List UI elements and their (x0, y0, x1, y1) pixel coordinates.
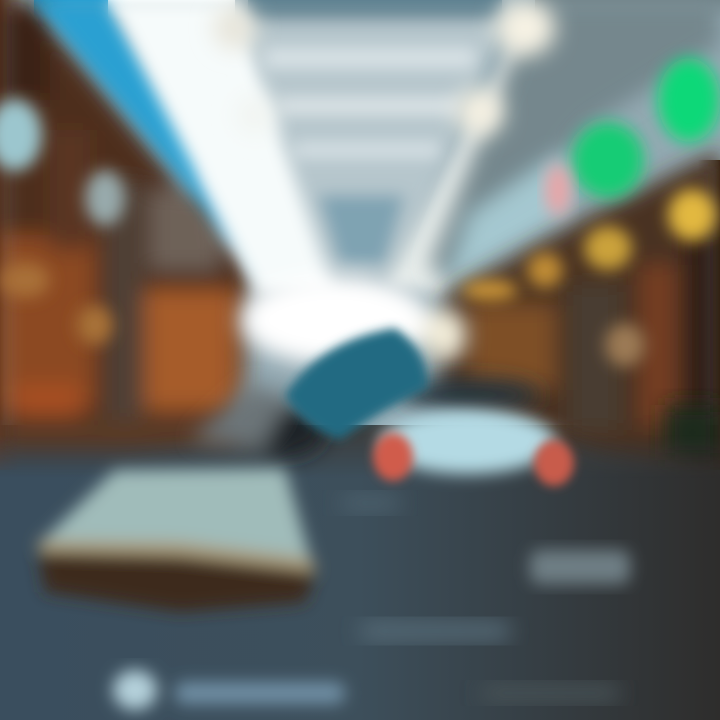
right ceiling (430, 0, 720, 290)
green light right (658, 58, 720, 142)
white ceiling stripe (108, 0, 335, 295)
wall plant shadow (665, 405, 720, 460)
central ceiling (235, 0, 515, 275)
blurred caption bottom left (113, 670, 345, 710)
floor (0, 435, 720, 720)
book page rim (38, 540, 316, 572)
left wall round lights (0, 99, 125, 345)
teal vehicle roof (285, 328, 428, 440)
ceiling lamps (213, 0, 555, 136)
blurred text patch center (360, 622, 510, 640)
green light left (572, 122, 644, 198)
book pages (38, 468, 312, 565)
blue ceiling stripe (32, 0, 285, 275)
right wall (440, 150, 720, 480)
red light right (534, 440, 574, 486)
blurred text patch upper center (340, 495, 400, 511)
right white beam (385, 30, 555, 295)
book edge (38, 550, 315, 612)
left wall (0, 0, 250, 460)
blurred text patch lower right (480, 685, 620, 701)
central white glow (240, 275, 467, 365)
yellow lamps (462, 189, 716, 367)
dark car shadow (190, 379, 540, 456)
light vehicle body (380, 410, 556, 474)
pink glow (545, 164, 571, 216)
red light left (373, 433, 413, 481)
blurred text patch right (530, 550, 630, 584)
edge underlays (0, 0, 720, 470)
lower dark backdrop (0, 425, 720, 720)
open book (38, 468, 316, 612)
